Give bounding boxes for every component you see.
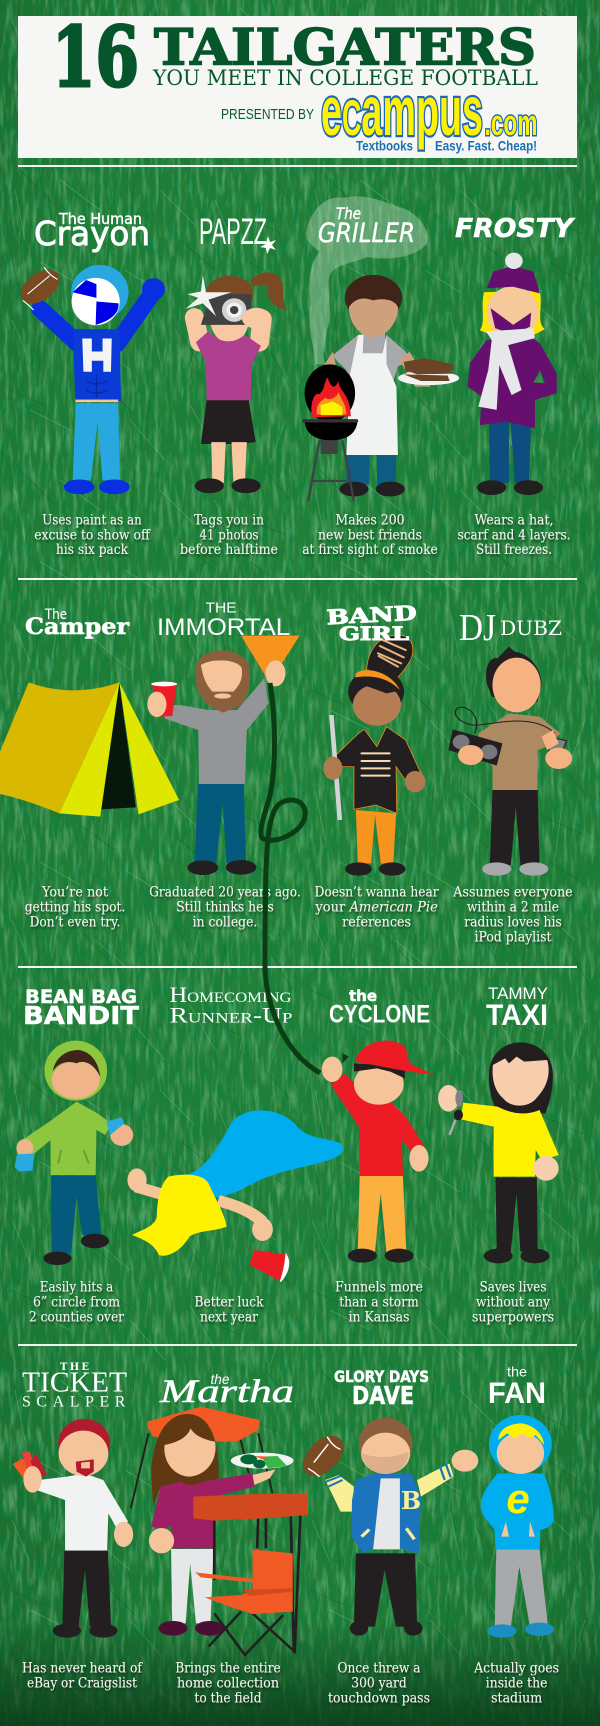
heading: GRILLER <box>318 218 415 249</box>
description: iPod playlist <box>474 930 552 946</box>
description <box>180 513 278 558</box>
title: tailgaters: TAILGATERS <box>154 18 536 76</box>
heading: BANDIT <box>23 1001 139 1030</box>
description: Uses paint as an <box>42 513 142 529</box>
heading <box>157 600 290 641</box>
heading <box>22 1362 127 1411</box>
heading: TAXI <box>486 999 548 1032</box>
panel: The Cyclone <box>322 987 434 1326</box>
smoke and griller figure <box>302 196 459 501</box>
heading: FROSTY <box>455 214 576 244</box>
description: references <box>342 915 411 931</box>
heading: BEAN BAG <box>25 986 137 1008</box>
description <box>328 1661 430 1707</box>
description: radius loves his <box>464 915 562 931</box>
flag rope: runs from the Immortal's flag to the Cyclone's hand <box>261 683 320 1073</box>
description <box>452 885 573 946</box>
jacket letter B: B <box>401 1486 421 1515</box>
hoodie letter e: e <box>506 1475 530 1522</box>
description <box>34 513 151 558</box>
panel: Glory Days Dave <box>295 1367 478 1707</box>
description: 41 photos <box>200 527 259 543</box>
description: Tags you in <box>194 513 264 529</box>
panel: The Ticket Scalper <box>13 1362 143 1692</box>
figure: letterman jacket with football <box>295 1418 478 1636</box>
figure: hostess with canopy, table and chair <box>131 1407 308 1655</box>
description: Easily hits a <box>40 1280 113 1296</box>
header panel <box>18 10 577 158</box>
figure: hoodie player <box>15 1041 133 1265</box>
description <box>194 1295 264 1326</box>
heading: Camper <box>25 614 129 640</box>
panel: Frosty <box>455 214 576 558</box>
heading: Homecoming <box>170 982 292 1007</box>
subtitle: YOU MEET IN COLLEGE FOOTBALL <box>152 66 538 91</box>
description: inside the <box>486 1676 547 1692</box>
heading <box>334 1367 429 1410</box>
heading: The <box>44 607 67 623</box>
logo: eCampus.com: Textbooks <box>356 138 413 154</box>
description: in Kansas <box>348 1310 410 1326</box>
figure: winter clothes <box>468 253 557 495</box>
heading: the <box>507 1364 527 1380</box>
panel: The Fan <box>473 1364 559 1707</box>
figure: tent <box>0 682 179 817</box>
panel: The Immortal <box>147 600 301 931</box>
description: Funnels more <box>335 1280 423 1296</box>
panel: The Griller <box>302 196 459 558</box>
description: Once threw a <box>338 1661 420 1677</box>
description: before halftime <box>180 542 278 558</box>
description: stadium <box>491 1691 542 1707</box>
description: home collection <box>177 1676 279 1692</box>
description: 6” circle from <box>33 1295 120 1311</box>
description <box>22 1661 143 1692</box>
description: to the field <box>194 1691 262 1707</box>
heading: DAVE <box>352 1381 414 1410</box>
description: Better luck <box>194 1295 264 1311</box>
heading <box>199 211 276 254</box>
heading: Martha <box>159 1374 294 1410</box>
smoke <box>306 196 428 364</box>
panel: Papzz <box>180 211 288 558</box>
description <box>149 885 301 931</box>
description: superpowers <box>472 1310 554 1326</box>
heading: IMMORTAL <box>157 614 290 641</box>
heading: The <box>336 204 361 223</box>
description: than a storm <box>339 1295 419 1311</box>
panel: Bean Bag Bandit <box>15 986 139 1326</box>
heading <box>488 1364 546 1410</box>
description: Still freezes. <box>476 542 552 558</box>
description <box>175 1661 281 1707</box>
panel: Band Girl <box>314 601 439 931</box>
description: eBay or Craigslist <box>27 1676 138 1692</box>
description: Saves lives <box>480 1280 547 1296</box>
figure: scalper with tickets <box>13 1419 133 1638</box>
description: Doesn’t wanna hear <box>315 885 439 901</box>
description: 2 counties over <box>29 1310 124 1326</box>
description: Actually goes <box>473 1661 559 1677</box>
description <box>472 1280 554 1326</box>
title number 16: 16 <box>52 10 139 106</box>
description: Still thinks he’s <box>176 900 274 916</box>
figure: funnel drinker <box>322 1041 434 1263</box>
description: Wears a hat, <box>474 513 554 529</box>
heading: THE <box>60 1362 89 1373</box>
logo: eCampus.com: .com <box>484 102 538 143</box>
description: Has never heard of <box>22 1661 143 1677</box>
heading: DJ <box>459 607 496 649</box>
description: within a 2 mile <box>467 900 559 916</box>
description: in college. <box>193 915 257 931</box>
heading <box>329 987 430 1029</box>
panel: Tammy Taxi <box>438 984 559 1326</box>
description: new best friends <box>318 527 422 543</box>
heading: SCALPER <box>22 1394 126 1411</box>
description: Makes 200 <box>336 513 404 529</box>
panel: The Camper <box>0 607 179 931</box>
description: 300 yard <box>351 1676 407 1692</box>
heading: FAN <box>488 1377 546 1410</box>
heading <box>326 601 417 645</box>
description: next year <box>200 1310 258 1326</box>
description: Don’t even try. <box>30 915 120 931</box>
heading: Runner-Up <box>170 1003 292 1028</box>
panel: The Martha <box>131 1371 308 1707</box>
description: scarf and 4 layers. <box>458 527 570 543</box>
description: his six pack <box>56 542 129 558</box>
heading: The Human <box>58 210 142 228</box>
heading: TAMMY <box>488 984 548 1003</box>
heading: CYCLONE <box>329 1001 430 1029</box>
panel: DJ Dubz <box>448 607 573 946</box>
heading: BAND <box>326 601 417 629</box>
description <box>302 513 438 558</box>
heading: GLORY DAYS <box>334 1367 429 1386</box>
figure: painted fan with football <box>14 263 165 494</box>
figure: eCampus hoodie fan <box>481 1415 554 1638</box>
heading <box>459 607 562 649</box>
description: Brings the entire <box>175 1661 281 1677</box>
description: Graduated 20 years ago. <box>149 885 301 901</box>
figure: band uniform <box>323 635 426 876</box>
description: excuse to show off <box>34 527 151 543</box>
description: Assumes everyone <box>452 885 573 901</box>
description <box>25 885 125 931</box>
heading: TICKET <box>22 1368 127 1399</box>
description <box>335 1280 423 1326</box>
logo: eCampus.com: Easy. Fast. Cheap! <box>435 138 537 154</box>
description: your American Pie <box>314 900 438 916</box>
description <box>473 1661 559 1707</box>
logo: eCampus.com: eCampus <box>321 72 483 150</box>
description: without any <box>476 1295 550 1311</box>
heading <box>318 204 415 249</box>
presented by: PRESENTED BY <box>221 107 314 123</box>
description: touchdown pass <box>328 1691 430 1707</box>
figure: passed out queen <box>127 1110 343 1282</box>
panel: The Human Crayon <box>14 210 165 558</box>
figure: DJ with boombox <box>448 647 572 876</box>
heading <box>23 986 139 1030</box>
heading: the <box>210 1371 230 1387</box>
heading: Crayon <box>34 214 150 253</box>
heading <box>170 982 292 1028</box>
panel: Homecoming Runner-Up <box>127 982 343 1326</box>
heading: DUBZ <box>500 616 562 640</box>
description <box>314 885 439 931</box>
description <box>458 513 570 558</box>
figure: photographer <box>186 272 288 493</box>
figure: old student with flag <box>147 636 300 875</box>
description: You’re not <box>41 885 109 901</box>
description: at first sight of smoke <box>302 542 438 558</box>
heading: THE <box>206 600 236 617</box>
description <box>29 1280 124 1326</box>
figure: designated driver with keys <box>438 1042 559 1263</box>
heading <box>486 984 548 1032</box>
heading: PAPZZ <box>199 211 267 252</box>
heading <box>159 1371 294 1410</box>
heading: GIRL <box>339 623 409 645</box>
description: getting his spot. <box>25 900 125 916</box>
heading: the <box>349 987 377 1005</box>
